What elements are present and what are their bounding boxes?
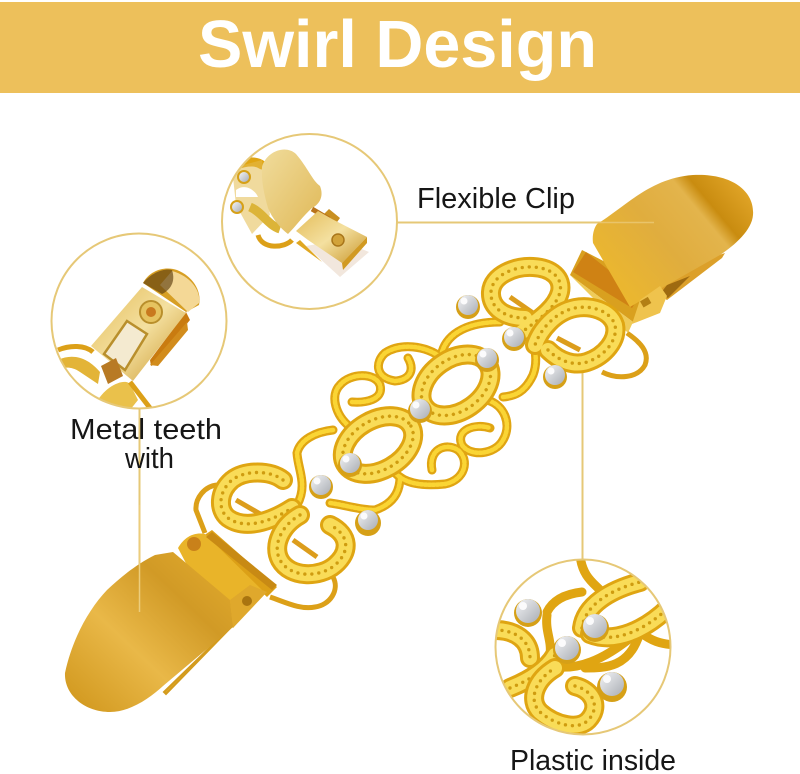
label: metal teeth with: Metal teeth (70, 414, 222, 446)
circle: plastic inside detail (496, 560, 670, 734)
leader lines (140, 222, 654, 612)
rhinestones (309, 295, 567, 536)
circle: metal teeth detail (58, 269, 200, 410)
top clip (570, 175, 753, 333)
circle outline: metal teeth (52, 234, 226, 408)
label: metal teeth with (70, 414, 222, 475)
crossing straps (236, 297, 580, 557)
leader line tip over top clip (598, 222, 654, 224)
title banner: Swirl Design (198, 7, 597, 82)
label: flexible clip: Flexible Clip (417, 183, 575, 215)
leader line tip over bottom clip (138, 505, 140, 612)
bottom D ring (196, 485, 335, 608)
circle outline: flexible clip (222, 134, 397, 309)
bottom clip (65, 530, 277, 712)
top D ring (602, 333, 646, 377)
title banner (0, 2, 800, 93)
circle outline: plastic inside (496, 560, 670, 734)
filigree bands (221, 267, 615, 574)
circle: flexible clip detail (230, 150, 369, 277)
label: metal teeth with: with (124, 443, 174, 475)
hair clip product (65, 175, 753, 712)
